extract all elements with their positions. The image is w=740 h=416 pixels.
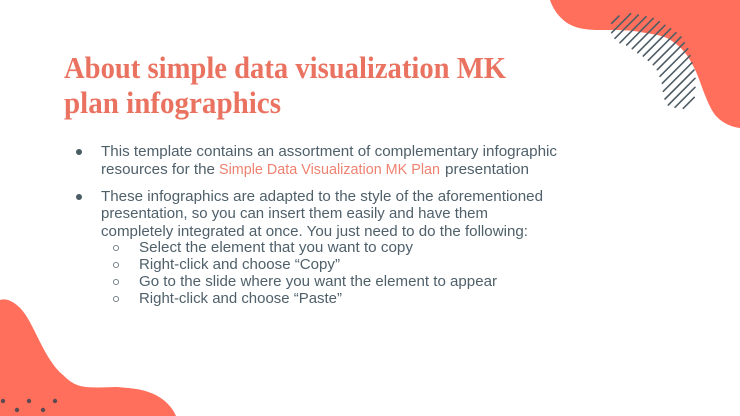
sub-list: steps: Right-click and choose “Copy” <box>139 257 340 273</box>
bullet: usage description <box>76 189 543 240</box>
decorative hatch pattern <box>612 14 695 108</box>
decorative blob: top right <box>550 0 740 128</box>
title: About simple data visualization MK <box>64 50 506 85</box>
bullet: template description <box>76 144 557 178</box>
bullet: usage description: presentation, so you can insert them easily and have them <box>101 206 488 222</box>
title <box>64 50 506 120</box>
bullet: usage description: These infographics are adapted to the style of the aforementioned <box>101 189 543 205</box>
bullet: template description: resources for the <box>101 162 215 178</box>
title: plan infographics <box>64 85 281 120</box>
bullet: template description: This template contains an assortment of complementary infographic <box>101 144 557 160</box>
sub-list: steps <box>113 240 497 307</box>
bullet: usage description: completely integrated at once. You just need to do the following: <box>101 224 528 240</box>
sub-list: steps: Select the element that you want to copy <box>139 240 414 256</box>
sub-list: steps: Right-click and choose “Paste” <box>139 291 342 307</box>
bullet: template description: presentation <box>445 162 529 178</box>
sub-list: steps: Go to the slide where you want the element to appear <box>139 274 497 290</box>
bullet: template description: Simple Data Visualization MK Plan <box>219 162 440 178</box>
decorative blob: bottom left <box>0 299 176 416</box>
decorative dots <box>1 399 57 412</box>
